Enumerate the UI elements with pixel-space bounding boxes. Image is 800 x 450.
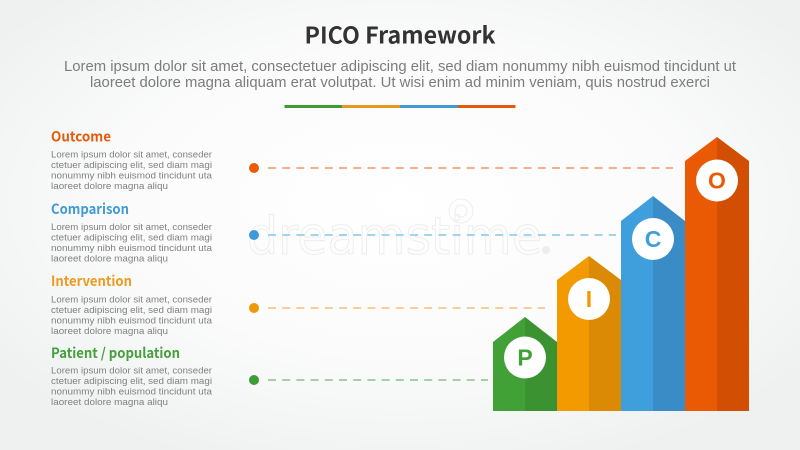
panel: outcome text: nonummy nibh euismod tincidunt uta	[51, 170, 213, 182]
subtitle text	[64, 58, 737, 91]
arrow bar: I: I	[586, 286, 592, 312]
connector: intervention	[249, 303, 545, 313]
panel: intervention text: laoreet dolore magna aliqu	[51, 326, 168, 337]
panel: outcome text: ctetuer adipiscing elit, sed diam magi	[51, 160, 212, 171]
panel: comparison text: nonummy nibh euismod tincidunt uta	[51, 243, 213, 254]
panel: intervention text: ctetuer adipiscing elit, sed diam magi	[51, 305, 212, 316]
title underline	[284, 105, 516, 108]
panel: comparison text: Lorem ipsum dolor sit amet, conseder	[51, 222, 213, 233]
panel: intervention text: Lorem ipsum dolor sit amet, conseder	[51, 294, 213, 306]
panel: patient / population text: Lorem ipsum dolor sit amet, conseder	[51, 366, 213, 376]
arrow bar: P	[493, 317, 557, 411]
watermark: dreamstime	[247, 207, 542, 267]
arrow bar: P: P	[517, 345, 533, 371]
arrow bar: O: O	[708, 168, 726, 194]
panel: comparison text: ctetuer adipiscing elit, sed diam magi	[51, 232, 212, 244]
panel: patient / population text: nonummy nibh euismod tincidunt uta	[51, 386, 213, 398]
panel: intervention text: Intervention	[51, 271, 132, 291]
title: PICO Framework	[304, 16, 496, 50]
connector: comparison	[249, 230, 616, 240]
panel: outcome text	[51, 126, 213, 192]
arrow bar: O	[685, 137, 749, 411]
subtitle text: Lorem ipsum dolor sit amet, consectetuer adipiscing elit, sed diam nonummy nibh euismod tincidunt ut	[64, 58, 737, 75]
panel: outcome text: Outcome	[51, 126, 111, 146]
panel: intervention text	[51, 271, 213, 337]
arrow bar: C: C	[645, 226, 661, 252]
panel: patient / population text: ctetuer adipiscing elit, sed diam magi	[51, 376, 212, 387]
panel: comparison text	[51, 199, 213, 264]
arrow bar: I	[557, 256, 621, 411]
connector: patient	[249, 375, 488, 385]
panel: outcome text: Lorem ipsum dolor sit amet, conseder	[51, 150, 213, 160]
panel: outcome text: laoreet dolore magna aliqu	[51, 181, 168, 192]
panel: patient / population text	[51, 343, 213, 408]
panel: patient / population text: Patient / population	[51, 343, 180, 363]
panel: comparison text: laoreet dolore magna aliqu	[51, 254, 168, 264]
panel: patient / population text: laoreet dolore magna aliqu	[51, 397, 168, 408]
panel: intervention text: nonummy nibh euismod tincidunt uta	[51, 316, 213, 326]
arrow bar: C	[621, 196, 685, 411]
connector: outcome	[249, 163, 673, 173]
subtitle text: laoreet dolore magna aliquam erat volutpat. Ut wisi enim ad minim veniam, quis nostrud exerci	[90, 74, 710, 91]
panel: comparison text: Comparison	[51, 199, 129, 219]
